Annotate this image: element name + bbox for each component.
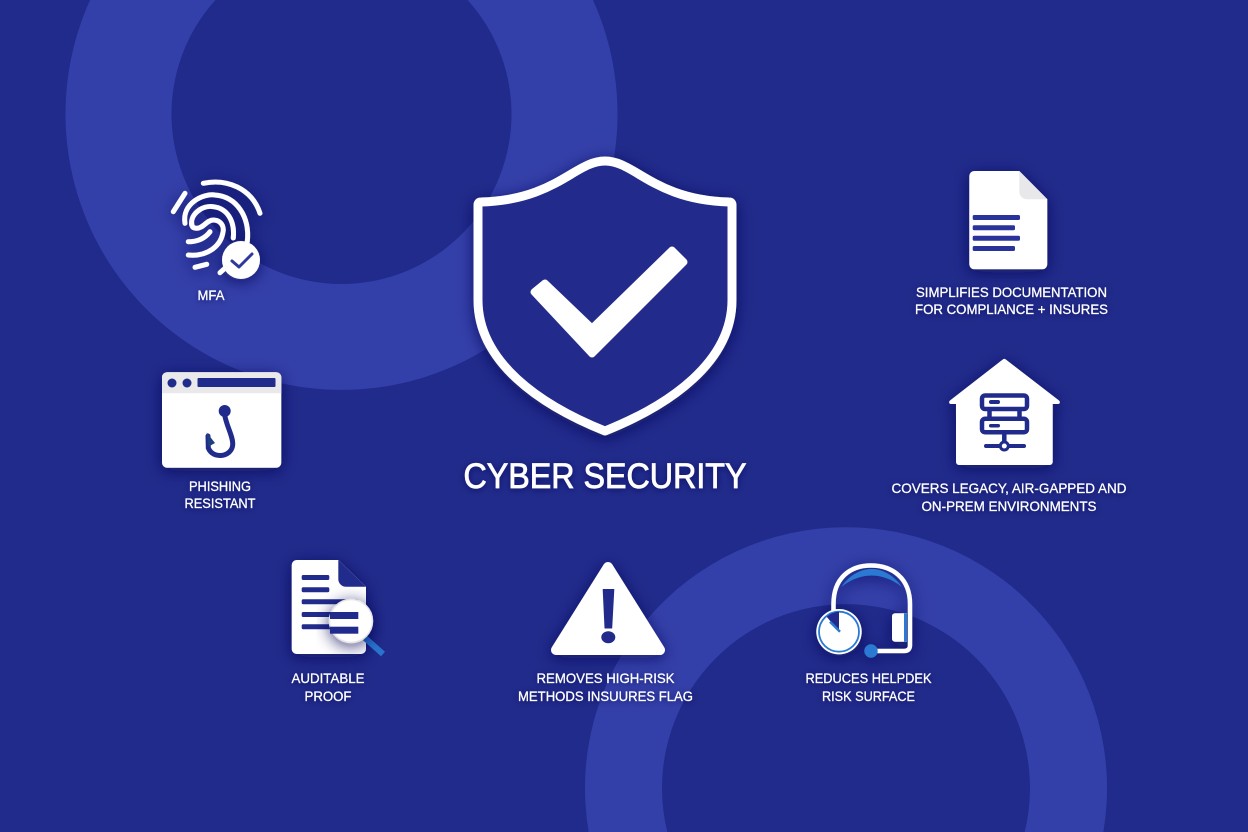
icon: warning triangle bbox=[556, 567, 660, 650]
label: reduces helpdesk risk surface: RISK SURFACE bbox=[822, 689, 915, 704]
label: reduces helpdesk risk surface: REDUCES HELPDEK bbox=[806, 671, 932, 686]
icon: document bbox=[969, 171, 1047, 269]
icon: headset with clock bbox=[816, 566, 910, 658]
label: simplifies documentation: SIMPLIFIES DOCUMENTATION bbox=[916, 285, 1107, 300]
label: covers legacy environments bbox=[892, 481, 1127, 514]
item: removes high-risk methods bbox=[518, 567, 693, 704]
item: reduces helpdesk risk surface bbox=[806, 566, 932, 704]
label: phishing resistant: RESISTANT bbox=[184, 496, 256, 511]
item: auditable proof bbox=[292, 560, 383, 704]
label: removes high-risk methods: REMOVES HIGH-RISK bbox=[536, 671, 675, 686]
label: phishing resistant bbox=[184, 479, 256, 511]
item: MFA bbox=[173, 182, 260, 303]
label: removes high-risk methods: METHODS INSUURES FLAG bbox=[518, 689, 693, 704]
label: auditable proof bbox=[292, 671, 364, 704]
label: covers legacy environments: ON-PREM ENVIRONMENTS bbox=[922, 499, 1096, 514]
label: removes high-risk methods bbox=[518, 671, 693, 704]
item: phishing resistant bbox=[162, 372, 281, 511]
label: phishing resistant: PHISHING bbox=[189, 479, 251, 494]
decorative ring: bottom right bbox=[585, 527, 1107, 832]
icon: house with server rack bbox=[949, 359, 1060, 465]
label: simplifies documentation: FOR COMPLIANCE + INSURES bbox=[915, 302, 1108, 317]
title: CYBER SECURITY bbox=[464, 457, 746, 496]
icon: fingerprint with check badge bbox=[173, 182, 260, 279]
icon: browser window with hook bbox=[162, 372, 281, 468]
decorative ring: top left bbox=[66, 0, 618, 390]
icon: central shield with check mark bbox=[478, 161, 732, 431]
item: covers legacy environments bbox=[892, 359, 1127, 514]
icon: document with magnifier bbox=[292, 560, 383, 654]
label: reduces helpdesk risk surface bbox=[806, 671, 932, 704]
label: covers legacy environments: COVERS LEGACY, AIR-GAPPED AND bbox=[892, 481, 1127, 496]
label: MFA: MFA bbox=[198, 288, 225, 303]
label: auditable proof: PROOF bbox=[304, 689, 352, 704]
label: simplifies documentation bbox=[915, 285, 1108, 317]
label: auditable proof: AUDITABLE bbox=[292, 671, 364, 686]
item: simplifies documentation bbox=[915, 171, 1108, 317]
